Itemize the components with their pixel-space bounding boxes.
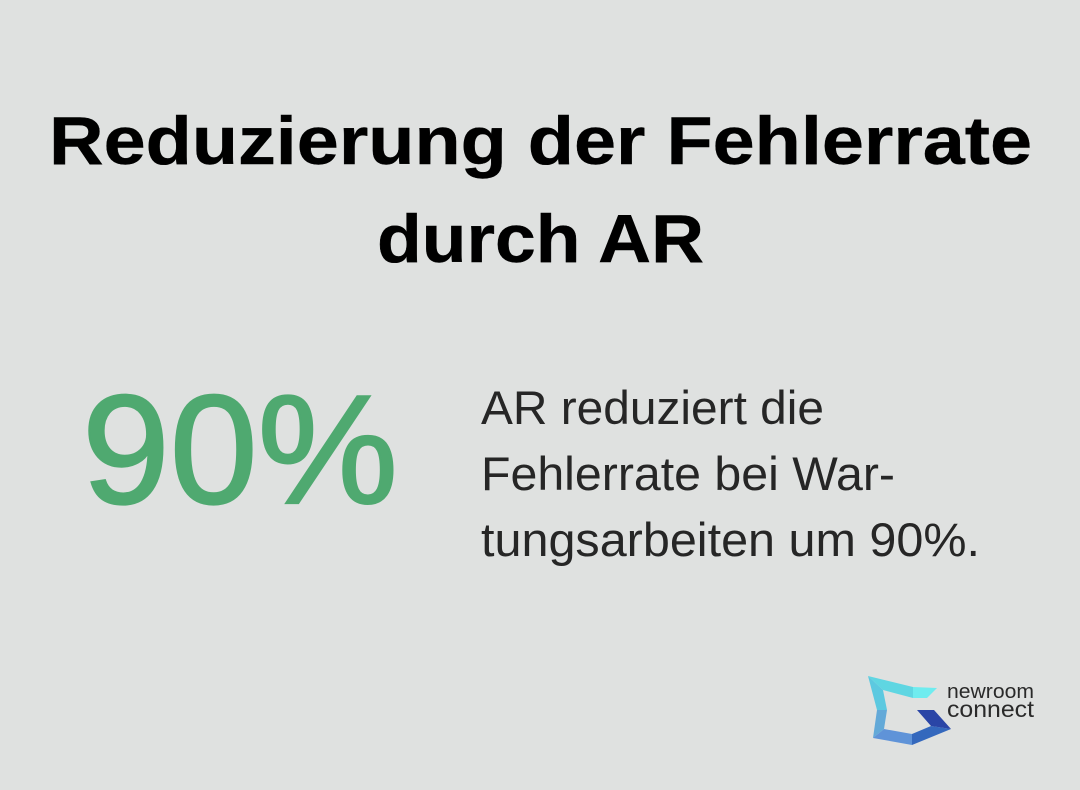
title [49,103,1032,277]
logo wordmark: connect [947,696,1035,722]
logo wordmark: newroom [947,681,1034,703]
logo wordmark [947,681,1035,722]
title: durch AR [377,201,704,277]
description text [481,381,980,566]
description text: Fehlerrate bei War- [481,447,895,500]
description text: tungsarbeiten um 90%. [481,513,980,566]
title: Reduzierung der Fehlerrate [49,103,1032,179]
logo: newroom connect [868,676,1035,745]
icon: logo mark [868,676,951,745]
description text: AR reduziert die [481,381,824,434]
big statistic: 90%: 90% [82,363,398,536]
